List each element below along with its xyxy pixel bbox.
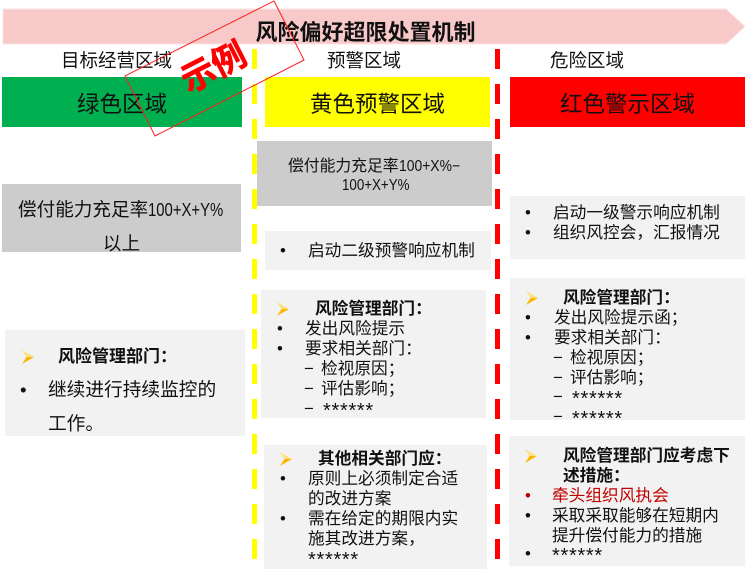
- icon: arrow bullet: [525, 449, 537, 463]
- panel: yellow zone other departments: 其他相关部门应：: [318, 449, 452, 468]
- panel: level 2 response: •: [280, 241, 286, 260]
- panel: red zone measures: 牵头组织风执会: [552, 486, 669, 505]
- panel: yellow zone risk management: 要求相关部门：: [305, 339, 422, 358]
- panel: yellow zone other departments: 的改进方案: [308, 489, 391, 508]
- zone label: warning: 预警区域: [327, 50, 401, 71]
- panel: red zone risk management: ******: [572, 388, 623, 410]
- header: green zone: [2, 77, 242, 127]
- panel: level 1 response: •: [525, 203, 531, 222]
- panel: green zone risk management: 工作。: [48, 413, 104, 434]
- panel: red zone risk management: 检视原因；: [570, 348, 653, 367]
- panel: level 1 response: 组织风控会，汇报情况: [553, 223, 720, 242]
- threshold box: green: 偿付能力充足率: [18, 199, 148, 220]
- panel: red zone risk management: −: [553, 387, 563, 406]
- panel: green zone risk management: 继续进行持续监控的: [48, 379, 216, 400]
- threshold box: yellow: 100+X+Y%: [342, 177, 409, 194]
- panel: red zone risk management: •: [525, 308, 531, 327]
- threshold box: green: 以上: [103, 233, 140, 254]
- panel: red zone measures: 风险管理部门应考虑下: [563, 446, 730, 465]
- title arrow banner: 风险偏好超限处置机制: [255, 20, 476, 45]
- panel: yellow zone other departments: •: [280, 509, 286, 528]
- title arrow banner: [2, 8, 745, 45]
- header: yellow zone: 黄色预警区域: [310, 92, 445, 117]
- panel: yellow zone risk management: •: [277, 339, 283, 358]
- panel: yellow zone risk management: [261, 290, 486, 418]
- panel: red zone measures: •: [525, 506, 531, 525]
- panel: level 2 response: 启动二级预警响应机制: [308, 241, 475, 260]
- panel: red zone measures: 采取采取能够在短期内: [552, 506, 719, 525]
- header: green zone: 绿色区域: [77, 92, 167, 117]
- threshold box: green: 100+X+Y%: [148, 199, 223, 220]
- threshold box: yellow: [257, 141, 492, 206]
- panel: level 1 response: •: [525, 223, 531, 242]
- panel: red zone risk management: −: [553, 368, 563, 387]
- header: red zone: 红色警示区域: [560, 92, 695, 117]
- red dashed divider: [495, 49, 500, 559]
- panel: yellow zone risk management: −: [304, 379, 314, 398]
- panel: yellow zone risk management: •: [277, 319, 283, 338]
- header: yellow zone: [265, 77, 490, 127]
- panel: yellow zone other departments: [264, 445, 487, 569]
- icon: arrow bullet: [526, 291, 538, 305]
- panel: red zone risk management: 发出风险提示函；: [554, 308, 688, 327]
- panel: red zone measures: 提升偿付能力的措施: [552, 526, 702, 545]
- panel: red zone measures: [509, 436, 745, 566]
- panel: red zone risk management: [510, 278, 745, 420]
- panel: yellow zone other departments: 施其改进方案，: [308, 529, 425, 548]
- panel: yellow zone other departments: 需在给定的期限内实: [308, 509, 458, 528]
- threshold box: green: [2, 184, 241, 252]
- panel: red zone measures: 述措施：: [563, 466, 630, 485]
- panel: yellow zone risk management: −: [304, 359, 314, 378]
- panel: red zone risk management: •: [525, 328, 531, 347]
- panel: yellow zone other departments: •: [280, 469, 286, 488]
- panel: yellow zone risk management: 风险管理部门：: [315, 299, 432, 318]
- panel: red zone measures: •: [525, 486, 531, 505]
- panel: yellow zone risk management: 检视原因；: [321, 359, 404, 378]
- icon: arrow bullet: [280, 452, 292, 466]
- panel: level 2 response: [265, 231, 491, 270]
- icon: arrow bullet: [277, 302, 289, 316]
- panel: green zone risk management: [5, 330, 245, 436]
- panel: yellow zone other departments: 原则上必须制定合适: [308, 469, 458, 488]
- panel: red zone risk management: 风险管理部门：: [563, 288, 680, 307]
- header: red zone: [510, 77, 745, 127]
- panel: yellow zone risk management: 发出风险提示: [305, 319, 405, 338]
- panel: yellow zone risk management: 评估影响；: [321, 379, 404, 398]
- zone label: target: 目标经营区域: [61, 50, 172, 71]
- panel: level 1 response: [510, 196, 745, 259]
- zone label: danger: 危险区域: [550, 50, 624, 71]
- panel: green zone risk management: 风险管理部门：: [58, 347, 177, 366]
- stamp: example: 示例: [175, 36, 253, 100]
- yellow dashed divider: [252, 49, 257, 559]
- panel: level 1 response: 启动一级警示响应机制: [553, 203, 720, 222]
- threshold box: yellow: 100+X%−: [399, 158, 460, 175]
- panel: red zone risk management: 要求相关部门：: [554, 328, 671, 347]
- icon: arrow bullet: [22, 350, 34, 364]
- panel: yellow zone risk management: −: [304, 399, 314, 418]
- panel: green zone risk management: •: [20, 379, 27, 400]
- threshold box: yellow: 偿付能力充足率: [288, 158, 399, 175]
- panel: red zone risk management: 评估影响；: [570, 368, 653, 387]
- panel: red zone risk management: −: [553, 348, 563, 367]
- panel: red zone measures: •: [525, 544, 531, 563]
